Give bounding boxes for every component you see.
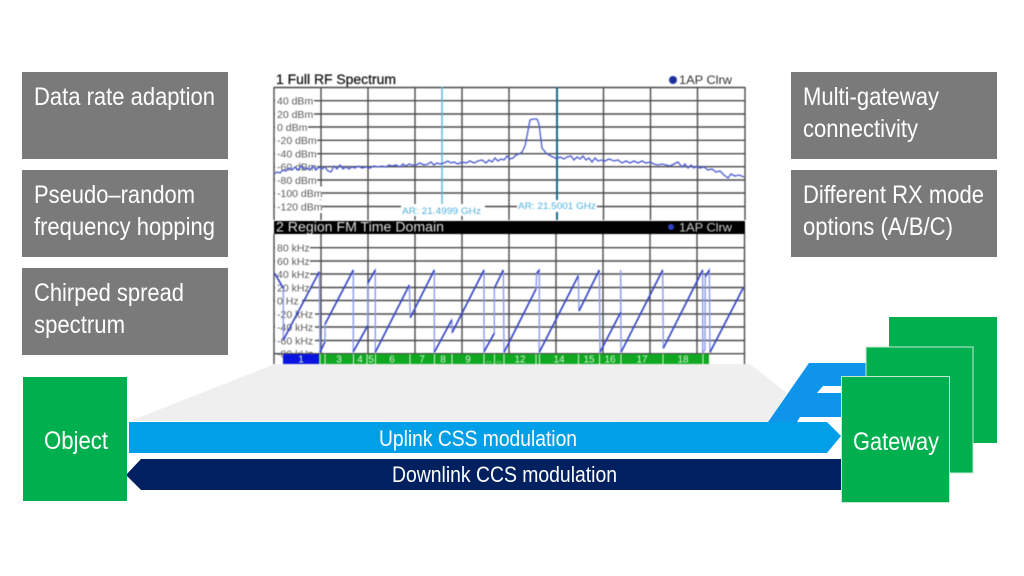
segment bar: [283, 354, 709, 366]
trace: chirps: [275, 270, 743, 352]
axis labels: kHz: 60 kHz: [277, 256, 310, 268]
axis labels: kHz: [275, 241, 315, 360]
axis labels: kHz: -20 kHz: [277, 309, 313, 321]
segment bar: 8: [440, 354, 446, 366]
axis labels: kHz: -80 kHz: [277, 348, 313, 360]
object node: [23, 377, 127, 501]
segment bar: 3: [336, 354, 342, 366]
axis labels: kHz: -40 kHz: [277, 322, 313, 334]
axis labels: kHz: 80 kHz: [277, 242, 310, 254]
feature box: multi-gateway connectivity: Multi-gateway: [803, 83, 939, 111]
segment bar: 14: [553, 354, 565, 366]
segment bar: 5: [368, 354, 374, 366]
feature box: RX mode options: options (A/B/C): [803, 213, 953, 241]
axis labels: dBm: -80 dBm: [277, 175, 317, 187]
arrow: uplink CSS modulation: [129, 363, 866, 453]
segment bar: 18: [677, 354, 689, 366]
heading: region FM time domain: [274, 220, 745, 234]
feature box: chirped spread spectrum: Chirped spread: [34, 279, 184, 307]
axis labels: dBm: -40 dBm: [277, 148, 317, 160]
gateway card: middle: [866, 347, 973, 473]
chart: FM time domain: [274, 220, 745, 366]
marker: light blue at 21.4999 GHz: AR: 21.4999 GHz: [402, 206, 481, 217]
segment bar: ..: [496, 354, 502, 366]
axis labels: dBm: [275, 94, 323, 214]
arrow: uplink CSS modulation: Uplink CSS modulation: [379, 426, 577, 451]
gateway card: back: [889, 317, 997, 443]
axis labels: dBm: -60 dBm: [277, 162, 317, 174]
axis labels: dBm: -20 dBm: [277, 135, 317, 147]
segment bar: ..: [486, 354, 492, 366]
gateway card: front: Gateway: [853, 428, 939, 456]
panel: right feature boxes: [791, 72, 997, 257]
legend: trace 1: 1AP Clrw: [679, 73, 732, 87]
axis labels: dBm: -120 dBm: [277, 202, 323, 214]
segment bar: 15: [583, 354, 595, 366]
segment bar: 17: [636, 354, 648, 366]
feature box: data rate adaption: Data rate adaption: [34, 83, 215, 111]
arrow: downlink CCS modulation: Downlink CCS modulation: [392, 462, 617, 487]
gateway card: front: [842, 376, 950, 502]
axis labels: dBm: 40 dBm: [277, 96, 313, 108]
arrow: downlink CCS modulation: [126, 459, 842, 490]
segment bar: 4: [357, 354, 363, 366]
feature box: data rate adaption: [22, 72, 228, 159]
gateway stack: [842, 317, 997, 502]
marker: dark at 21.5001 GHz: [517, 87, 597, 220]
axis labels: dBm: -100 dBm: [277, 188, 323, 200]
axis labels: kHz: 40 kHz: [277, 269, 310, 281]
segment bar: 12: [514, 354, 526, 366]
feature box: RX mode options: [791, 170, 997, 257]
panel: zoom projection backdrop: [130, 364, 787, 422]
heading: region FM time domain: 1AP Clrw: [679, 220, 732, 234]
panel: spectrum analyzer screenshot: [274, 72, 745, 366]
heading: region FM time domain: 2 Region FM Time Domain: [276, 220, 444, 234]
feature box: frequency hopping: Pseudo–random: [34, 181, 195, 209]
axis labels: kHz: -60 kHz: [277, 336, 313, 348]
object node: Object: [44, 427, 108, 455]
segment bar: 16: [604, 354, 616, 366]
axis labels: kHz: 20 kHz: [277, 282, 310, 294]
feature box: chirped spread spectrum: [22, 268, 228, 355]
segment bar: 6: [389, 354, 395, 366]
heading: full RF spectrum: 1 Full RF Spectrum: [276, 72, 396, 87]
segment bar: 1: [298, 354, 304, 366]
feature box: chirped spread spectrum: spectrum: [34, 311, 125, 339]
feature box: frequency hopping: frequency hopping: [34, 213, 215, 241]
feature box: RX mode options: Different RX mode: [803, 181, 984, 209]
marker: dark at 21.5001 GHz: AR: 21.5001 GHz: [518, 201, 596, 212]
feature box: multi-gateway connectivity: [791, 72, 997, 159]
axis labels: dBm: 20 dBm: [277, 109, 313, 121]
chart: full RF spectrum: [274, 72, 745, 220]
feature box: frequency hopping: [22, 170, 228, 257]
marker: light blue at 21.4999 GHz: [401, 87, 485, 217]
feature box: multi-gateway connectivity: connectivity: [803, 115, 918, 143]
panel: left feature boxes: [22, 72, 228, 355]
axis labels: dBm: 0 dBm: [277, 122, 308, 134]
axis labels: kHz: 0 Hz: [277, 296, 299, 308]
segment bar: 7: [419, 354, 425, 366]
trace: spectrum: [274, 119, 744, 178]
segment bar: 9: [465, 354, 471, 366]
